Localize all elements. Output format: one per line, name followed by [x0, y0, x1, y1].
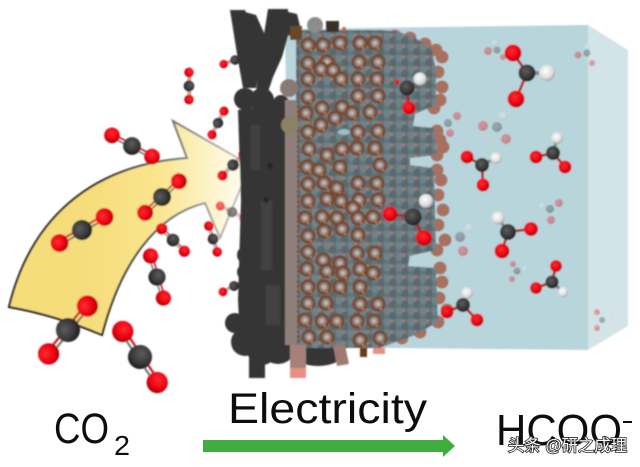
- catalyst particle layer: [296, 30, 438, 348]
- copper nanoparticles: [298, 36, 387, 347]
- green arrow: [203, 435, 455, 457]
- watermark: 头条 @研之成理: [508, 437, 627, 455]
- faded background formate molecules: [444, 40, 612, 331]
- salmon copper particle edge: [388, 30, 454, 344]
- formate molecules: [382, 44, 572, 326]
- label: CO2: CO: [54, 405, 109, 453]
- pink electrode strip: [280, 79, 385, 378]
- label: Electricity: Electricity: [228, 385, 428, 433]
- top debris of electrode: [290, 17, 346, 40]
- label: HCOO-: HCOO: [496, 406, 622, 455]
- black carbon fibre layer: [225, 9, 342, 378]
- label: CO2: 2: [114, 430, 130, 461]
- CO2 molecules: [33, 50, 252, 398]
- curved yellow arrow: [9, 121, 250, 335]
- electrolyte cube: [285, 25, 628, 350]
